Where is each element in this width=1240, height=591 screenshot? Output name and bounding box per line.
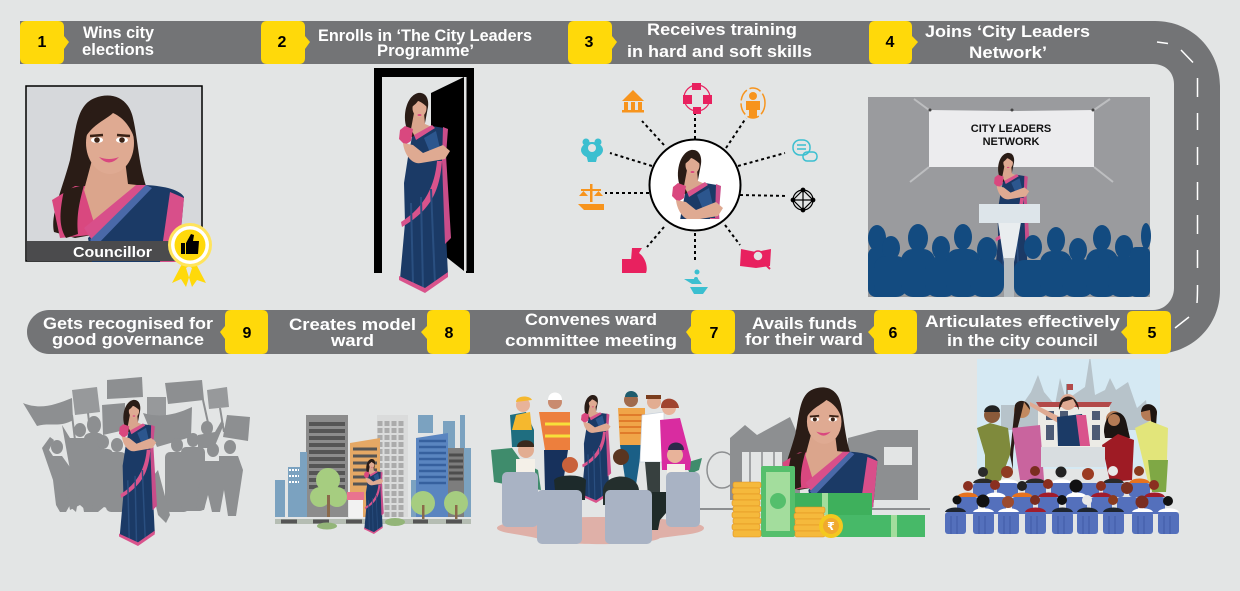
shop: [347, 492, 364, 518]
step 5 badge: [1121, 311, 1171, 354]
step 4 heading: Joins ‘City Leaders: [925, 22, 1090, 41]
icon: funding hand: [684, 270, 708, 294]
step 7 badge: [686, 310, 735, 354]
step 5 badge: 5: [1148, 325, 1157, 342]
podium: [979, 204, 1040, 297]
step 1 badge: [20, 21, 69, 64]
woman in pink: [660, 399, 691, 470]
step 2 heading: Enrolls in ‘The City Leaders: [318, 26, 532, 45]
rupee coin: ₹: [827, 520, 835, 533]
standing site worker: [539, 392, 570, 490]
step 4 badge: 4: [886, 34, 895, 51]
plants: [491, 448, 702, 490]
chairs: [502, 472, 700, 544]
road strip: [275, 518, 471, 530]
panel: doorway: [374, 68, 474, 293]
step 5 heading: in the city council: [947, 331, 1098, 350]
step 1 badge: 1: [38, 34, 47, 51]
icon: award rosette: [168, 223, 212, 287]
coin stacks: [732, 482, 825, 537]
step 4 badge: [869, 21, 918, 64]
step 7 heading: committee meeting: [505, 331, 677, 350]
panel: recognised crowd: [23, 377, 250, 546]
road: [20, 21, 1220, 354]
councillor caption: [27, 241, 177, 261]
rug: [497, 517, 704, 544]
step 6 badge: [868, 310, 917, 354]
step 2 badge: 2: [278, 34, 287, 51]
step 2 badge: [261, 21, 310, 64]
icon: team network: [683, 83, 712, 114]
step 4 heading: Network’: [969, 43, 1047, 62]
step 1 heading: elections: [82, 40, 154, 59]
sky: [977, 359, 1160, 469]
icon: network globe: [791, 188, 815, 212]
icon: money bag and calculator: [622, 248, 647, 273]
step 9 heading: Gets recognised for: [43, 314, 213, 333]
panel: city council: [945, 355, 1179, 534]
trees: [310, 468, 468, 519]
panel: training hub: [578, 83, 818, 294]
standing councillor: [581, 395, 611, 503]
step 8 heading: Creates model: [289, 315, 416, 334]
seated people: [516, 440, 685, 530]
icon: institution: [622, 90, 644, 112]
audience rows: [945, 466, 1179, 534]
podium: [1041, 447, 1105, 467]
step 3 badge: [568, 21, 617, 64]
banknote stacks: [761, 466, 925, 537]
panel: model ward city: [275, 415, 471, 534]
rupee coin: [819, 514, 843, 538]
banner: NETWORK: [983, 136, 1039, 148]
icon: people circle: [581, 138, 603, 162]
banner: [928, 108, 1094, 167]
people on stage: [977, 394, 1168, 492]
audience silhouettes: [868, 223, 1151, 297]
standing engineer: [510, 396, 534, 447]
panel: city leaders network stage: [868, 97, 1151, 297]
step 8 heading: ward: [330, 331, 374, 350]
icon: leader person: [741, 88, 765, 118]
doctor: [640, 395, 664, 495]
step 7 badge: 7: [710, 325, 719, 342]
icon: book and magnifier: [740, 249, 771, 269]
step 1 heading: Wins city: [83, 23, 155, 42]
step 3 badge: 3: [585, 34, 594, 51]
icon: scales of justice: [578, 184, 604, 210]
step 7 heading: Convenes ward: [525, 310, 657, 329]
panel: ward funds: [700, 387, 930, 538]
step 3 heading: in hard and soft skills: [627, 42, 812, 61]
step 9 badge: [220, 310, 268, 354]
step 5 heading: Articulates effectively: [925, 312, 1121, 331]
step 9 heading: good governance: [52, 330, 204, 349]
striped man: [618, 391, 645, 485]
step 9 badge: 9: [243, 325, 252, 342]
councillor caption: Councillor: [73, 244, 152, 261]
panel: ward committee meeting: [491, 391, 704, 544]
house line drawing: [700, 417, 930, 510]
banner: CITY LEADERS: [971, 123, 1051, 135]
step 6 heading: Avails funds: [752, 314, 857, 333]
step 8 badge: 8: [445, 325, 454, 342]
town hall: [1036, 384, 1112, 447]
step 8 badge: [421, 310, 470, 354]
icon: chat bubbles: [793, 140, 817, 161]
step 3 heading: Receives training: [647, 20, 797, 39]
panel: councillor portrait: [26, 86, 212, 287]
hub portrait: [648, 138, 742, 232]
step 6 heading: for their ward: [745, 330, 863, 349]
skyline: [1001, 355, 1150, 430]
step 6 badge: 6: [889, 325, 898, 342]
speaker: [994, 153, 1030, 285]
step 2 heading: Programme’: [377, 41, 474, 60]
